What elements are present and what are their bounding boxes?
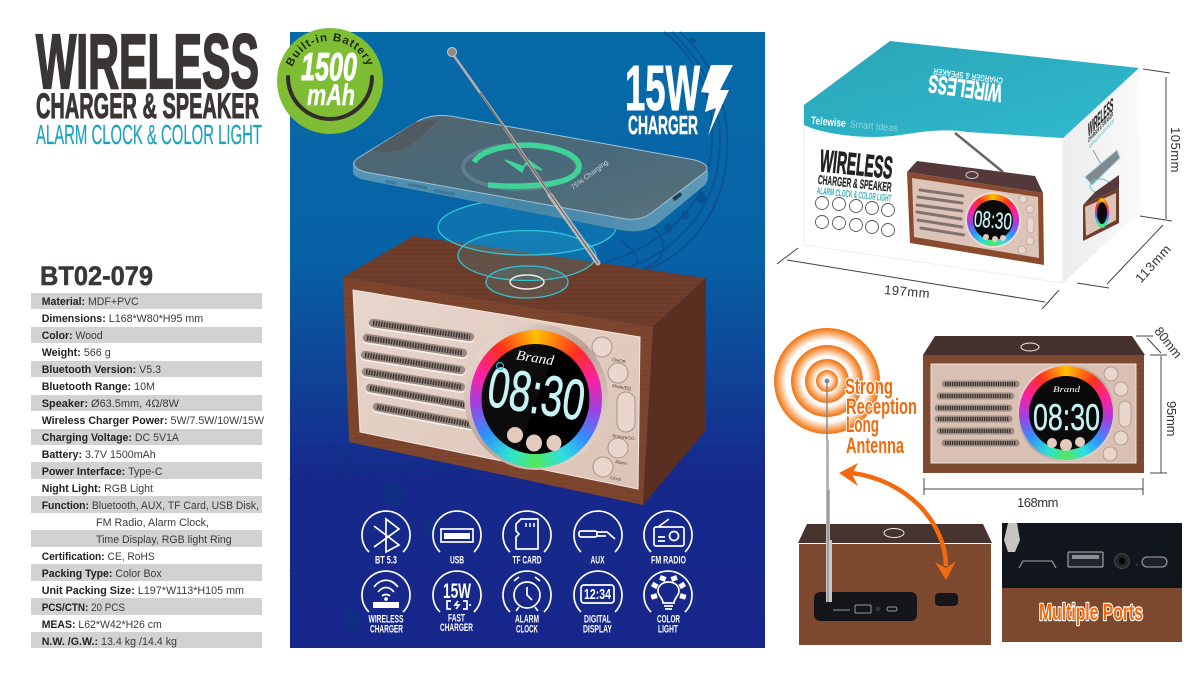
icon row 2 bbox=[362, 571, 692, 636]
front panel bbox=[353, 290, 640, 489]
panel: specification table: Function: Bluetooth, AUX, TF Card, USB Disk, bbox=[42, 500, 259, 512]
icon: 15W fast charger: FAST bbox=[448, 613, 465, 625]
type-c port bbox=[1142, 557, 1167, 567]
arrow: antenna rotation bbox=[839, 463, 956, 580]
tf slot bbox=[1019, 561, 1056, 568]
panel: retail box bbox=[804, 41, 1140, 283]
icon: bluetooth: BT 5.3 bbox=[375, 554, 397, 566]
product: speaker radio in perspective: Clock bbox=[610, 475, 623, 482]
product: speaker radio in perspective: On/Off bbox=[612, 357, 626, 364]
product: rear view bbox=[798, 524, 992, 645]
reception signal target bbox=[774, 328, 880, 434]
dimension: 168mm: 168mm bbox=[1017, 495, 1059, 510]
product: speaker radio in perspective bbox=[343, 236, 706, 505]
title: WIRELESS bbox=[36, 19, 259, 105]
dimension: 95mm bbox=[1150, 355, 1179, 473]
box mini feature icons bbox=[816, 196, 894, 236]
panel: specification table: Time Display, RGB light Ring bbox=[96, 534, 232, 546]
heading: 15W charger bbox=[625, 52, 733, 140]
label: Multiple Ports bbox=[1039, 599, 1143, 625]
icon: aux bbox=[574, 511, 622, 566]
usb port bbox=[1068, 552, 1103, 567]
icon: wireless charger: CHARGER bbox=[370, 624, 403, 636]
icon: 15W fast charger: CHARGER bbox=[440, 622, 473, 634]
charging ring bbox=[463, 145, 577, 189]
badge: built-in battery 1500 mAh bbox=[277, 28, 383, 134]
icon: alarm clock bbox=[503, 571, 551, 636]
panel: blue product hero background bbox=[290, 32, 765, 648]
heading: 15W charger: 15W bbox=[625, 52, 700, 124]
box lid text: WIRELESS bbox=[927, 69, 1004, 107]
dimension: 168mm bbox=[924, 478, 1143, 510]
box side bbox=[1063, 68, 1140, 283]
callout: strong reception long antenna: Strong bbox=[845, 374, 893, 399]
title: CHARGER & SPEAKER bbox=[36, 87, 259, 126]
panel: specification table: Dimensions: L168*W80*H95 mm bbox=[42, 313, 203, 325]
box side art: ALARM CLOCK & COLOR LIGHT bbox=[1089, 118, 1114, 151]
icon: tf card bbox=[503, 511, 551, 566]
model number: BT02-079 bbox=[40, 261, 153, 291]
front view clock: Brand bbox=[1053, 384, 1081, 394]
brand bbox=[810, 115, 898, 134]
panel: specification table: Packing Type: Color Box bbox=[42, 568, 162, 580]
panel: ports close-up bbox=[1002, 523, 1182, 642]
antenna tip bbox=[1004, 523, 1020, 552]
icon: 15W fast charger bbox=[433, 571, 481, 634]
icon: alarm clock: ALARM bbox=[515, 614, 539, 626]
rear antenna bbox=[824, 378, 830, 602]
title bbox=[36, 19, 262, 150]
badge: built-in battery 1500 mAh: 1500 bbox=[301, 46, 357, 89]
box lid subtitle: CHARGER & SPEAKER bbox=[932, 66, 1003, 86]
panel: specification table: FM Radio, Alarm Clock, bbox=[96, 517, 209, 529]
panel: specification table: Material: MDF+PVC bbox=[42, 296, 139, 308]
brand: Smart Ideas bbox=[849, 119, 898, 134]
product: speaker radio in perspective: Mode/EQ bbox=[612, 383, 632, 391]
aux jack bbox=[1114, 554, 1130, 568]
front view clock: 08:30 bbox=[1033, 397, 1100, 438]
panel: specification table: Unit Packing Size: L197*W113*H105 mm bbox=[42, 585, 244, 597]
clock bezel bbox=[464, 324, 608, 470]
icon: digital display: DIGITAL bbox=[584, 614, 611, 626]
icon: digital display: 12:34 bbox=[584, 586, 611, 603]
panel: specification table: Speaker: Ø63.5mm, 4Ω/8W bbox=[42, 398, 180, 410]
panel: specification table: Wireless Charger Power: 5W/7.5W/10W/15W bbox=[42, 415, 265, 427]
badge: built-in battery 1500 mAh: Built-in Battery bbox=[286, 33, 373, 66]
rear port plate bbox=[814, 592, 917, 621]
panel: specification table: Bluetooth Version: V5.3 bbox=[42, 364, 161, 376]
badge: built-in battery 1500 mAh: mAh bbox=[307, 79, 355, 112]
callout: strong reception long antenna: Reception bbox=[846, 394, 917, 419]
icon: color light: COLOR bbox=[657, 614, 680, 626]
front view buttons bbox=[1103, 367, 1131, 461]
wireless charging rings bbox=[438, 199, 616, 298]
panel: retail box: WIRELESS bbox=[1088, 94, 1113, 142]
charge label: 75% Charging bbox=[570, 159, 610, 192]
panel: specification table: Color: Wood bbox=[42, 330, 103, 342]
icon: bluetooth bbox=[362, 511, 410, 566]
phone screen bbox=[354, 116, 707, 219]
icon: lightning bolt bbox=[701, 65, 733, 136]
panel: specification table: Power Interface: Type-C bbox=[42, 466, 163, 478]
charging bolt bbox=[505, 160, 542, 172]
phone body bbox=[353, 163, 708, 231]
icon row 1 bbox=[362, 511, 692, 566]
box side art bbox=[1083, 94, 1120, 241]
side buttons bbox=[592, 337, 635, 477]
dimension: 197mm bbox=[777, 248, 1059, 309]
dimension: 105mm bbox=[1140, 69, 1183, 221]
front view speaker slats bbox=[938, 384, 1016, 443]
dimension: 80mm: 80mm bbox=[1151, 324, 1185, 361]
heading: 15W charger: CHARGER bbox=[628, 110, 698, 140]
decoration: music notes bbox=[290, 32, 727, 648]
panel: specification table: Bluetooth Range: 10M bbox=[42, 381, 155, 393]
phone on wireless charger bbox=[353, 116, 708, 231]
dimension: 95mm: 95mm bbox=[1164, 401, 1179, 437]
top face bbox=[343, 236, 706, 327]
icon: usb bbox=[433, 511, 481, 566]
box product picture bbox=[907, 161, 1044, 265]
antenna bbox=[448, 48, 598, 263]
box antenna bbox=[955, 133, 1003, 172]
box title bbox=[816, 143, 896, 205]
icon: fm radio bbox=[644, 511, 692, 566]
box side art: CHARGER & SPEAKER bbox=[1088, 111, 1113, 145]
dimension: 80mm bbox=[1136, 324, 1185, 361]
box product picture: 08:30 bbox=[973, 205, 1013, 235]
icon: color light bbox=[644, 571, 692, 636]
icon: wireless charger bbox=[362, 571, 410, 636]
dimension: 105mm: 105mm bbox=[1168, 127, 1183, 173]
dimension: 197mm: 197mm bbox=[884, 282, 931, 301]
title: ALARM CLOCK & COLOR LIGHT bbox=[36, 119, 262, 150]
panel: specification table: PCS/CTN: 20 PCS bbox=[42, 602, 125, 614]
icon: 15W fast charger: 15W bbox=[443, 580, 471, 603]
callout: strong reception long antenna bbox=[845, 374, 917, 458]
panel: specification table: Night Light: RGB Light bbox=[42, 483, 153, 495]
right face bbox=[643, 278, 706, 505]
front frame bbox=[343, 277, 653, 505]
box title: ALARM CLOCK & COLOR LIGHT bbox=[816, 186, 892, 205]
panel: specification table: Weight: 566 g bbox=[42, 347, 111, 359]
icon: tf card: TF CARD bbox=[512, 554, 542, 566]
icon: wireless charger: WIRELESS bbox=[368, 614, 404, 626]
display disc bbox=[482, 344, 590, 454]
panel: specification table: Charging Voltage: DC 5V1A bbox=[42, 432, 180, 444]
icon: digital display: DISPLAY bbox=[583, 624, 612, 636]
box title: CHARGER & SPEAKER bbox=[817, 172, 893, 195]
icon: usb: USB bbox=[450, 554, 464, 566]
callout: strong reception long antenna: Antenna bbox=[846, 433, 905, 458]
icon: color light: LIGHT bbox=[658, 624, 678, 636]
display disc: Brand bbox=[515, 348, 556, 369]
rainbow light ring bbox=[470, 330, 602, 468]
dimension: 113mm: 113mm bbox=[1132, 241, 1174, 286]
icon: digital display bbox=[574, 571, 622, 636]
panel: specification table: Battery: 3.7V 1500mAh bbox=[42, 449, 156, 461]
panel: specification table: N.W. /G.W.: 13.4 kg /14.4 kg bbox=[42, 636, 177, 648]
icon: alarm clock: CLOCK bbox=[516, 624, 538, 636]
front view clock bbox=[1017, 364, 1115, 462]
panel: specification table bbox=[31, 293, 265, 648]
panel: specification table: MEAS: L62*W42*H26 cm bbox=[42, 619, 162, 631]
speaker slats bbox=[365, 323, 473, 426]
brand: Telewise bbox=[810, 115, 846, 130]
display disc: 08:30 bbox=[484, 355, 589, 433]
callout: strong reception long antenna: Long bbox=[846, 412, 879, 437]
product: speaker radio in perspective: Snooze/1O bbox=[612, 433, 635, 441]
box front bbox=[804, 105, 1063, 283]
product: front view bbox=[923, 336, 1145, 473]
icon: aux: AUX bbox=[590, 554, 605, 566]
teal top with wave bbox=[804, 41, 1139, 138]
icon: fm radio: FM RADIO bbox=[651, 554, 686, 566]
panel: specification table: Certification: CE, RoHS bbox=[42, 551, 155, 563]
panel: retail box: WIRELESS bbox=[818, 143, 894, 186]
product: speaker radio in perspective: Alarm bbox=[615, 459, 628, 466]
dimension: 113mm bbox=[1077, 225, 1174, 288]
